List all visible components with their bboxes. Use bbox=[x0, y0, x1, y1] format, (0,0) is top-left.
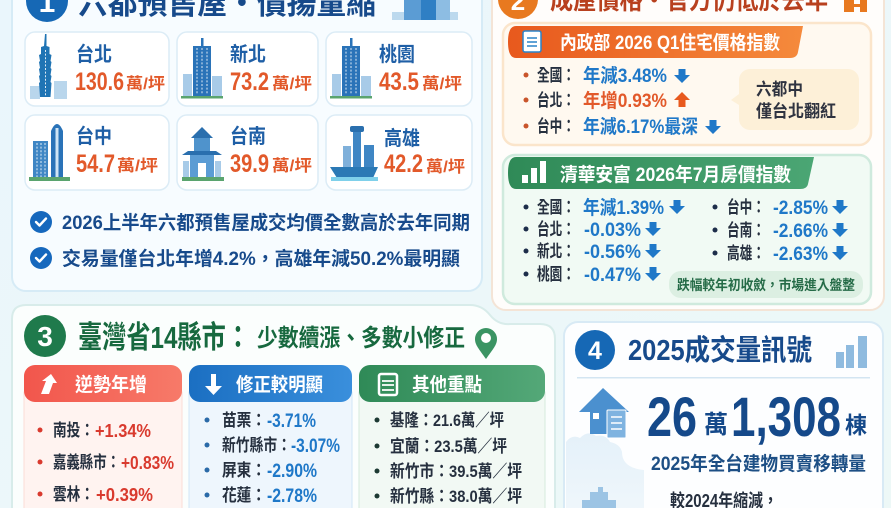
row: 新竹縣市: -3.07% bbox=[291, 436, 340, 457]
sub-panel: housing price index bbox=[503, 155, 871, 304]
row: 台中: 年減6.17%最深 bbox=[583, 115, 698, 138]
city card: 新北: 新北 bbox=[230, 42, 266, 66]
section 1 number badge bbox=[26, 0, 68, 22]
row: 桃園: -0.47% bbox=[584, 265, 641, 286]
section 3 heading: 臺灣省14縣市： bbox=[78, 320, 250, 355]
icon: skyline bbox=[392, 0, 458, 20]
row: 新竹縣市: 新竹縣市： bbox=[222, 435, 291, 455]
row: 屏東: -2.90% bbox=[267, 461, 317, 482]
row: 全國: 全國： bbox=[537, 66, 575, 85]
city card: 台中: 台中 bbox=[76, 124, 112, 148]
icon: bar chart bbox=[836, 336, 867, 368]
icon: house with document bbox=[579, 388, 629, 438]
city card: 高雄: 42.2 bbox=[384, 150, 423, 178]
section 2 number badge bbox=[498, 0, 538, 19]
row: 台中: -2.85% bbox=[773, 198, 828, 219]
column: rising bbox=[24, 365, 182, 508]
big number: transfers: 萬 bbox=[704, 411, 728, 439]
row: 新北: 新北： bbox=[537, 241, 575, 261]
row: 新北: -0.56% bbox=[584, 242, 641, 263]
row: 雲林: +0.39% bbox=[96, 485, 153, 505]
panel 1: pre-sale prices bbox=[12, 0, 482, 291]
row: 台中 bbox=[712, 197, 848, 219]
section 4 heading: 2025成交量訊號 bbox=[628, 334, 812, 367]
row: 台北 bbox=[524, 89, 690, 112]
row: 雲林 bbox=[38, 485, 153, 505]
city card: 桃園: 萬/坪 bbox=[422, 75, 462, 93]
row: 台北: -0.03% bbox=[584, 220, 641, 241]
row: 屏東 bbox=[204, 461, 317, 482]
row: 南投 bbox=[38, 420, 151, 441]
city card: 新北: 73.2 bbox=[230, 68, 269, 96]
row: 全國 bbox=[524, 64, 690, 87]
row: 高雄 bbox=[712, 243, 848, 265]
city card: 台北 bbox=[25, 32, 169, 106]
city card: 桃園: 43.5 bbox=[379, 68, 419, 96]
section 3 number badge bbox=[24, 315, 66, 357]
row: 台南 bbox=[712, 220, 848, 242]
city card: 桃園: 桃園 bbox=[379, 43, 415, 66]
row: 雲林: 雲林： bbox=[53, 485, 94, 504]
big number: transfers: 26 bbox=[647, 385, 697, 448]
row: 基隆: 基隆：21.6萬／坪 bbox=[390, 411, 504, 430]
row: 苗栗 bbox=[204, 411, 316, 432]
city card: 高雄: 高雄 bbox=[384, 126, 420, 150]
city card: 台北: 台北 bbox=[76, 42, 112, 66]
row: 台北 bbox=[524, 219, 661, 241]
column: corrections bbox=[189, 365, 352, 508]
city card: 新北 bbox=[177, 32, 318, 106]
city card: 新北: 萬/坪 bbox=[272, 75, 312, 93]
city card: 台南: 台南 bbox=[230, 124, 266, 148]
row: 台南: 台南： bbox=[727, 220, 765, 240]
city card: 台中: 萬/坪 bbox=[117, 157, 158, 175]
city card: 台南: 萬/坪 bbox=[272, 157, 312, 175]
takeaway 2: 交易量僅台北年增4.2%，高雄年減50.2%最明顯 bbox=[62, 247, 460, 270]
icon: bars bbox=[522, 161, 546, 183]
column: other highlights bbox=[359, 365, 545, 508]
row: 花蓮: 花蓮： bbox=[222, 486, 266, 505]
row: 花蓮 bbox=[204, 486, 317, 507]
column header: corrections: 修正較明顯 bbox=[236, 373, 323, 396]
sub-panel: MOI index bbox=[503, 23, 871, 145]
big number: transfers: 棟 bbox=[845, 412, 867, 438]
panel 3: 14 counties bbox=[12, 305, 555, 508]
row: 台北: 年增0.93% bbox=[583, 89, 667, 112]
section 3 heading bbox=[78, 320, 465, 355]
row: 全國: 年減3.48% bbox=[583, 64, 667, 87]
row: 新竹市: 新竹市：39.5萬／坪 bbox=[390, 461, 522, 481]
banner: MOI bbox=[508, 26, 803, 58]
column header: rising: 逆勢年增 bbox=[75, 373, 147, 396]
row: 南投: +1.34% bbox=[95, 421, 151, 441]
callout: only Taipei: 六都中 bbox=[756, 80, 803, 99]
panel 4: 2025 volume bbox=[564, 322, 883, 508]
city card: 台北: 130.6 bbox=[75, 68, 124, 96]
note: consolidation: 跌幅較年初收斂，市場進入盤整 bbox=[677, 277, 855, 293]
row: 新竹縣: 新竹縣：38.0萬／坪 bbox=[390, 486, 522, 506]
row: 高雄: 高雄： bbox=[727, 243, 765, 263]
city card: 台南: 39.9 bbox=[230, 150, 269, 178]
row: 台中: 台中： bbox=[537, 116, 575, 136]
row: 桃園: 桃園： bbox=[537, 265, 575, 284]
section 3 heading: 少數續漲、多數小修正 bbox=[257, 325, 465, 352]
section 3 number badge: 3 bbox=[37, 321, 53, 352]
city card: 桃園 bbox=[326, 32, 472, 106]
panel 2: existing home prices bbox=[492, 0, 884, 310]
row: 桃園 bbox=[524, 265, 661, 286]
row: 台中: 台中： bbox=[727, 197, 765, 217]
row: 全國: 年減1.39% bbox=[583, 196, 664, 219]
banner: index bbox=[508, 157, 814, 189]
row: 台北: 台北： bbox=[537, 219, 575, 239]
banner: MOI: 內政部 2026 Q1住宅價格指數 bbox=[560, 31, 780, 54]
city card: 高雄: 萬/坪 bbox=[426, 158, 465, 176]
row: 宜蘭: 宜蘭：23.5萬／坪 bbox=[390, 436, 507, 456]
row: 新竹縣市 bbox=[204, 435, 340, 457]
section 4 number badge: 4 bbox=[588, 337, 602, 365]
callout: only Taipei: 僅台北翻紅 bbox=[756, 101, 836, 121]
row: 嘉義縣市: 嘉義縣市： bbox=[53, 452, 120, 472]
icon: building bbox=[582, 487, 616, 508]
row: 苗栗: 苗栗： bbox=[222, 411, 266, 430]
icon: document bbox=[523, 31, 541, 52]
caption: transfers: 2025年全台建物買賣移轉量 bbox=[651, 452, 866, 475]
row: 全國: 全國： bbox=[537, 198, 575, 217]
city card: 台中 bbox=[25, 115, 169, 190]
column header: other highlights bbox=[359, 365, 545, 402]
column header: corrections bbox=[189, 365, 352, 402]
callout: only Taipei bbox=[731, 69, 859, 130]
city card: 台南 bbox=[177, 115, 318, 190]
row: 新北 bbox=[524, 241, 661, 263]
note: consolidation bbox=[669, 271, 863, 298]
column header: rising bbox=[24, 365, 182, 402]
row: 高雄: -2.63% bbox=[773, 244, 828, 265]
takeaway 1: 2026上半年六都預售屋成交均價全數高於去年同期 bbox=[62, 211, 470, 234]
row: 嘉義縣市 bbox=[38, 452, 174, 473]
icon: map pin bbox=[475, 328, 497, 359]
row: 南投: 南投： bbox=[53, 420, 94, 440]
row: 苗栗: -3.71% bbox=[267, 411, 316, 432]
row: 台南: -2.66% bbox=[773, 221, 828, 242]
row: 台北: 台北： bbox=[537, 90, 575, 110]
city card: 高雄 bbox=[326, 115, 472, 190]
row: 全國 bbox=[524, 196, 685, 219]
city card: 台北: 萬/坪 bbox=[126, 75, 165, 93]
banner: index: 清華安富 2026年7月房價指數 bbox=[560, 163, 791, 186]
section 4 number badge bbox=[575, 330, 615, 370]
icon: house bbox=[844, 0, 867, 12]
city card: 台中: 54.7 bbox=[76, 150, 115, 178]
big number: transfers: 1,308 bbox=[731, 385, 841, 448]
column header: other highlights: 其他重點 bbox=[412, 374, 482, 396]
row: 屏東: 屏東： bbox=[222, 461, 266, 480]
decorative cloud wash bbox=[566, 433, 644, 508]
row: 花蓮: -2.78% bbox=[267, 486, 317, 507]
row: 嘉義縣市: +0.83% bbox=[121, 453, 174, 473]
row: 台中 bbox=[524, 115, 721, 138]
big number: transfers bbox=[647, 385, 867, 448]
